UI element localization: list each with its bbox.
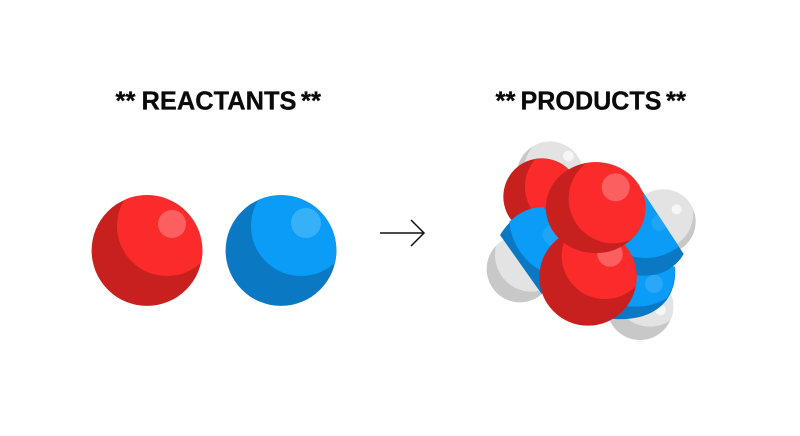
heading: products: PRODUCTS xyxy=(520,86,662,116)
icon: red reactant sphere xyxy=(92,195,202,306)
sphere: blue left xyxy=(500,207,564,294)
sphere: red upper xyxy=(546,162,646,254)
heading: products: ** xyxy=(666,86,687,116)
sphere: red lower xyxy=(539,238,637,326)
icon: blue reactant sphere xyxy=(226,195,336,306)
sphere: grey bottom xyxy=(610,294,674,340)
sphere: red back xyxy=(503,158,569,220)
heading: reactants: ** xyxy=(116,86,136,116)
sphere: blue lower right xyxy=(603,263,675,319)
icon: product molecule cluster xyxy=(487,130,696,340)
sphere: grey top xyxy=(518,142,582,170)
sphere: grey left xyxy=(486,240,542,302)
arrow: reaction direction xyxy=(380,220,424,246)
heading: reactants: REACTANTS xyxy=(142,86,296,116)
heading: products: ** xyxy=(496,86,516,116)
heading: reactants: ** xyxy=(301,86,322,116)
sphere: blue upper right xyxy=(624,190,684,276)
sphere: grey right xyxy=(645,189,696,249)
